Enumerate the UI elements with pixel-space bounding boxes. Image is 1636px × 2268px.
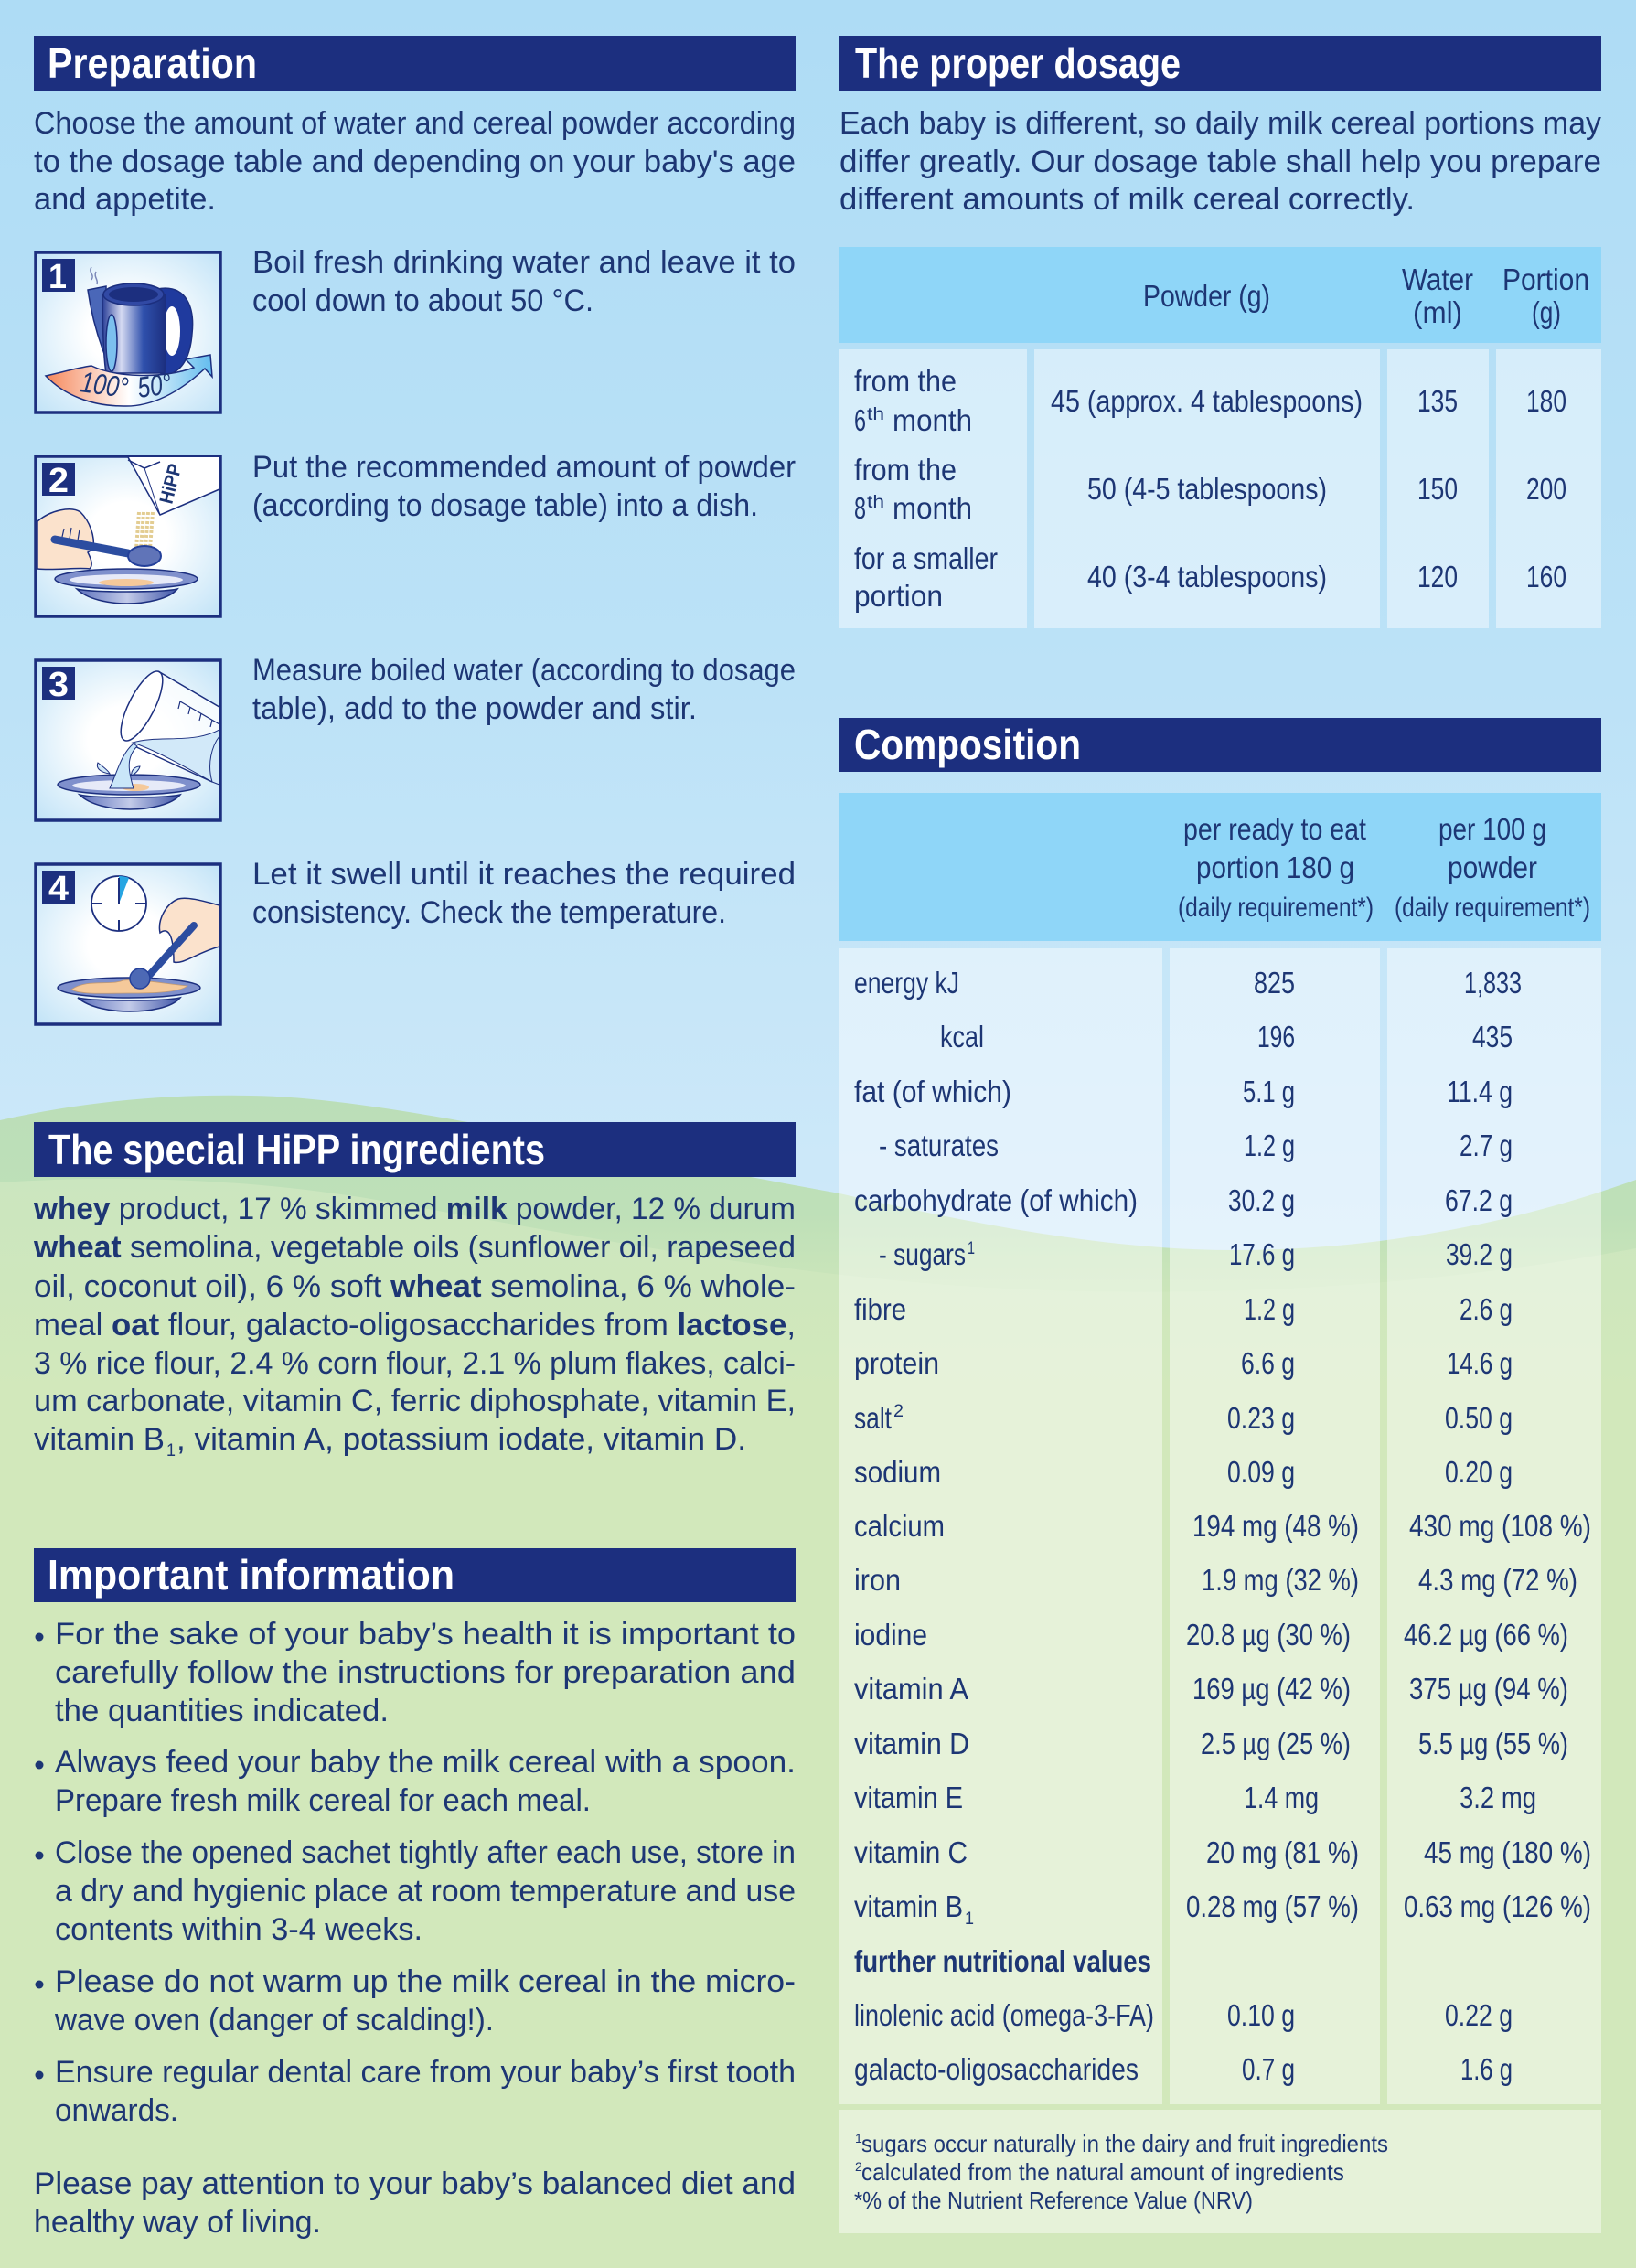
row: protein: 14.6 g xyxy=(1447,1346,1513,1380)
table header: Portion xyxy=(1502,262,1589,296)
text: bullet 4: Please do not warm up the milk cereal in the micro- xyxy=(55,1964,796,1999)
text: dosage intro xyxy=(839,106,1601,217)
row: vitamin B1: 1 xyxy=(965,1910,974,1929)
row: vitamin B1: vitamin B xyxy=(854,1889,963,1923)
table header xyxy=(839,247,1601,343)
row: 6th month: 45 (approx. 4 tablespoons) xyxy=(1051,384,1363,418)
row: vitamin A: 375 µg (94 %) xyxy=(1409,1672,1568,1706)
row: vitamin E: 3.2 mg xyxy=(1460,1781,1536,1814)
row: 6th month: 135 xyxy=(1417,384,1458,418)
row: linolenic acid xyxy=(854,1998,1513,2032)
row: iodine xyxy=(854,1618,1568,1652)
text: closing note: healthy way of living. xyxy=(34,2205,321,2240)
row: protein xyxy=(854,1346,1513,1380)
row: fat xyxy=(854,1075,1513,1108)
row: 6th month: th xyxy=(867,405,884,424)
text: ingredient list: whey product, 17 % skimmed milk powder, 12 % durum xyxy=(33,1192,796,1226)
text: bullet 1: For the sake of your baby’s health it is important to xyxy=(55,1617,796,1652)
text: step 3: Measure boiled water (according to dosage xyxy=(252,653,796,688)
row: protein: 6.6 g xyxy=(1241,1346,1295,1380)
row: vitamin E: 1.4 mg xyxy=(1244,1781,1319,1814)
table header: composition: powder xyxy=(1448,850,1537,884)
panel: composition xyxy=(839,718,1601,2233)
row: vitamin C: 45 mg (180 %) xyxy=(1424,1835,1591,1869)
row: iron: iron xyxy=(854,1563,901,1597)
row: smaller portion: 120 xyxy=(1417,560,1458,594)
text: bullet 2: Prepare fresh milk cereal for each meal. xyxy=(55,1783,591,1818)
row: iodine: 20.8 µg (30 %) xyxy=(1186,1618,1351,1652)
row: sugars: 1 xyxy=(968,1239,975,1258)
footnotes: 1 xyxy=(855,2131,862,2145)
row: kcal: kcal xyxy=(940,1020,984,1054)
row: linolenic acid: linolenic acid (omega-3-FA) xyxy=(854,1998,1154,2032)
row: smaller portion: portion xyxy=(854,579,943,613)
text: bullet 2: Always feed your baby the milk cereal with a spoon. xyxy=(55,1745,796,1780)
icon: step 2 powder: HiPP xyxy=(156,462,186,506)
table header: composition: per ready to eat xyxy=(1183,812,1366,846)
icon: step 1 kettle: 100° xyxy=(79,365,131,404)
text: preparation intro: Choose the amount of water and cereal powder according xyxy=(34,106,796,141)
row: sodium: sodium xyxy=(854,1455,941,1489)
row: 8th month: month xyxy=(893,491,972,525)
text: closing note xyxy=(34,2166,796,2240)
row: calcium: 430 mg (108 %) xyxy=(1409,1509,1591,1543)
heading: Important information: Important information xyxy=(48,1551,454,1599)
heading: Composition xyxy=(839,718,1601,772)
row: 6th month xyxy=(854,364,1566,437)
text: step 2: (according to dosage table) into a dish. xyxy=(252,488,758,523)
row: 6th month: 6 xyxy=(854,403,866,437)
row: vitamin D xyxy=(854,1727,1568,1760)
table header: (ml) xyxy=(1413,295,1462,329)
text: preparation intro: and appetite. xyxy=(34,182,216,217)
icon: step 1 kettle: 50° xyxy=(135,367,174,404)
row: vitamin B1: 0.63 mg (126 %) xyxy=(1404,1889,1591,1923)
row: sugars: 39.2 g xyxy=(1446,1237,1513,1271)
text: ingredient list xyxy=(33,1192,796,1460)
row: galacto-oligosaccharides xyxy=(854,2052,1513,2086)
text: preparation intro xyxy=(34,106,796,217)
row: calcium xyxy=(854,1509,1591,1543)
row: salt xyxy=(854,1401,1513,1435)
footnotes: 2 xyxy=(855,2159,862,2174)
text: step 1 xyxy=(252,245,796,318)
row: galacto-oligosaccharides: 1.6 g xyxy=(1460,2052,1513,2086)
table header: composition: per 100 g xyxy=(1438,812,1546,846)
row: further nutritional values: further nutritional values xyxy=(854,1944,1151,1978)
row: iron xyxy=(854,1563,1577,1597)
table: dosage xyxy=(839,247,1601,628)
row: 8th month: 150 xyxy=(1417,472,1458,506)
row: salt: 0.50 g xyxy=(1445,1401,1513,1435)
row: vitamin C: 20 mg (81 %) xyxy=(1206,1835,1359,1869)
row: smaller portion: 40 (3-4 tablespoons) xyxy=(1087,560,1327,594)
row: 8th month: 200 xyxy=(1526,472,1566,506)
row: sodium: 0.20 g xyxy=(1445,1455,1513,1489)
row: vitamin C: vitamin C xyxy=(854,1835,968,1869)
text: dosage intro: Each baby is different, so daily milk cereal portions may xyxy=(839,106,1601,141)
row: protein: protein xyxy=(854,1346,939,1380)
panel: important information xyxy=(34,1548,796,2240)
text: bullet 1 xyxy=(35,1617,796,1728)
row: kcal xyxy=(940,1020,1513,1054)
row: vitamin A: vitamin A xyxy=(854,1672,968,1706)
row: energy kJ: 825 xyxy=(1254,966,1295,1000)
row: vitamin D: 5.5 µg (55 %) xyxy=(1418,1727,1568,1760)
row: energy kJ: energy kJ xyxy=(854,966,959,1000)
heading: Preparation xyxy=(34,36,796,91)
row: iodine: iodine xyxy=(854,1618,927,1652)
row: galacto-oligosaccharides: 0.7 g xyxy=(1242,2052,1295,2086)
row: kcal: 435 xyxy=(1472,1020,1513,1054)
text: bullet 4: wave oven (danger of scalding!). xyxy=(54,2003,494,2038)
icon: step 2 powder: 2 xyxy=(48,462,69,500)
row: smaller portion: for a smaller xyxy=(854,541,998,575)
row: vitamin E xyxy=(854,1781,1536,1814)
row: vitamin D: vitamin D xyxy=(854,1727,969,1760)
panel: preparation xyxy=(34,36,796,1024)
heading: The special HiPP ingredients xyxy=(34,1122,796,1177)
row: salt: 2 xyxy=(893,1402,904,1421)
heading: The proper dosage: The proper dosage xyxy=(855,39,1181,87)
heading: The proper dosage xyxy=(839,36,1601,91)
text: ingredient list: 1 xyxy=(166,1441,176,1460)
footnotes: *% of the Nutrient Reference Value (NRV) xyxy=(854,2187,1253,2214)
table header: Powder (g) xyxy=(1143,279,1270,313)
row: saturates: - saturates xyxy=(879,1129,999,1162)
text: bullet 5: Ensure regular dental care from your baby’s first tooth xyxy=(55,2055,796,2090)
text: bullet 3: contents within 3-4 weeks. xyxy=(55,1912,422,1947)
row: kcal: 196 xyxy=(1257,1020,1295,1054)
text: ingredient list: 3 % rice flour, 2.4 % corn flour, 2.1 % plum flakes, calci- xyxy=(34,1346,796,1381)
text: bullet 3: Close the opened sachet tightly after each use, store in xyxy=(55,1835,796,1870)
heading: Important information xyxy=(34,1548,796,1602)
text: ingredient list: meal oat flour, galacto-oligosaccharides from lactose, xyxy=(34,1308,796,1343)
text: ingredient list: vitamin B xyxy=(34,1422,165,1457)
text: step 1: Boil fresh drinking water and leave it to xyxy=(252,245,796,280)
row: iodine: 46.2 µg (66 %) xyxy=(1404,1618,1568,1652)
row: fibre xyxy=(854,1292,1513,1326)
row: smaller portion: 160 xyxy=(1526,560,1566,594)
row: fat: fat (of which) xyxy=(854,1075,1011,1108)
table header: composition: (daily requirement*) xyxy=(1178,893,1374,923)
table header: composition xyxy=(839,793,1601,941)
heading: Composition: Composition xyxy=(854,721,1081,768)
text: step 3 xyxy=(252,653,796,726)
row: fat: 5.1 g xyxy=(1243,1075,1295,1108)
panel: ingredients xyxy=(33,1122,796,1460)
row: smaller portion xyxy=(854,541,1566,613)
text: step 4 xyxy=(252,857,796,930)
table cell backgrounds xyxy=(839,948,1601,2104)
row: sugars: 17.6 g xyxy=(1229,1237,1295,1271)
row: saturates xyxy=(879,1129,1513,1162)
table header: composition: (daily requirement*) xyxy=(1395,893,1590,923)
text: step 2 xyxy=(252,450,796,523)
icon: step 2 powder xyxy=(36,446,220,616)
text: dosage intro: different amounts of milk cereal correctly. xyxy=(839,182,1415,217)
text: bullet 1: the quantities indicated. xyxy=(55,1694,389,1728)
row: 6th month: month xyxy=(893,403,972,437)
text: ingredient list: oil, coconut oil), 6 % soft wheat semolina, 6 % whole- xyxy=(34,1269,796,1304)
text: step 4: consistency. Check the temperature. xyxy=(252,895,726,930)
text: bullet 5: onwards. xyxy=(55,2093,178,2128)
row: saturates: 1.2 g xyxy=(1244,1129,1295,1162)
row: 8th month: from the xyxy=(854,453,957,487)
row: 8th month: th xyxy=(867,493,884,512)
row: fibre: 2.6 g xyxy=(1460,1292,1513,1326)
table cell backgrounds xyxy=(839,349,1601,628)
text: bullet 2 xyxy=(35,1745,796,1818)
row: salt: salt xyxy=(854,1401,892,1435)
row: fibre: 1.2 g xyxy=(1244,1292,1295,1326)
icon: step 4 stir and clock: 4 xyxy=(48,870,69,908)
footnotes: calculated from the natural amount of ingredients xyxy=(861,2158,1344,2186)
text: step 2: Put the recommended amount of powder xyxy=(252,450,796,485)
text: bullet 3: a dry and hygienic place at room temperature and use xyxy=(55,1874,796,1909)
row: fat: 11.4 g xyxy=(1447,1075,1513,1108)
row: carbohydrate: 30.2 g xyxy=(1228,1183,1295,1217)
row: linolenic acid: 0.22 g xyxy=(1445,1998,1513,2032)
row: vitamin E: vitamin E xyxy=(854,1781,963,1814)
row: vitamin B1 xyxy=(854,1889,1591,1929)
table header: (g) xyxy=(1532,295,1561,329)
text: bullet 5 xyxy=(35,2055,796,2128)
text: dosage intro: differ greatly. Our dosage table shall help you prepare xyxy=(839,144,1601,179)
row: 6th month: from the xyxy=(854,364,957,398)
row: vitamin B1: 0.28 mg (57 %) xyxy=(1186,1889,1359,1923)
row: 8th month: 8 xyxy=(854,491,866,525)
row: 8th month xyxy=(854,453,1566,525)
background: front green hill xyxy=(0,1179,1636,2268)
table header: Water xyxy=(1402,262,1473,296)
text: step 3: table), add to the powder and stir. xyxy=(252,691,697,726)
background: rear green hill xyxy=(0,1096,1636,2268)
panel: proper dosage xyxy=(839,36,1601,628)
text: ingredient list: , vitamin A, potassium iodate, vitamin D. xyxy=(176,1422,746,1457)
row: sugars: - sugars xyxy=(879,1237,966,1271)
row: vitamin D: 2.5 µg (25 %) xyxy=(1201,1727,1351,1760)
text: ingredient list: wheat semolina, vegetable oils (sunflower oil, rapeseed xyxy=(33,1230,796,1265)
icon: step 4 stir and clock xyxy=(36,864,220,1024)
text: step 4: Let it swell until it reaches the required xyxy=(252,857,796,892)
text: ingredient list: um carbonate, vitamin C, ferric diphosphate, vitamin E, xyxy=(34,1384,796,1418)
text: bullet 4 xyxy=(35,1964,796,2038)
text: bullet 3 xyxy=(35,1835,796,1947)
row: vitamin A: 169 µg (42 %) xyxy=(1192,1672,1351,1706)
row: 8th month: 50 (4-5 tablespoons) xyxy=(1087,472,1327,506)
icon: step 3 pouring water: 3 xyxy=(48,666,69,704)
row: sugars xyxy=(879,1237,1513,1271)
text: bullet 1: carefully follow the instructions for preparation and xyxy=(55,1655,796,1690)
text: preparation intro: to the dosage table and depending on your baby's age xyxy=(34,144,796,179)
row: carbohydrate xyxy=(854,1183,1513,1217)
row: galacto-oligosaccharides: galacto-oligosaccharides xyxy=(854,2052,1139,2086)
icon: step 1 kettle: 1 xyxy=(48,258,67,296)
row: fibre: fibre xyxy=(854,1292,906,1326)
row: energy kJ xyxy=(854,966,1522,1000)
row: carbohydrate: carbohydrate (of which) xyxy=(854,1183,1138,1217)
row: 6th month: 180 xyxy=(1526,384,1566,418)
footnotes: sugars occur naturally in the dairy and fruit ingredients xyxy=(861,2130,1388,2157)
row: salt: 0.23 g xyxy=(1227,1401,1295,1435)
row: vitamin C xyxy=(854,1835,1591,1869)
row: calcium: calcium xyxy=(854,1509,945,1543)
icon: step 1 kettle xyxy=(36,252,220,412)
row: saturates: 2.7 g xyxy=(1460,1129,1513,1162)
heading: Preparation: Preparation xyxy=(48,39,257,87)
row: carbohydrate: 67.2 g xyxy=(1445,1183,1513,1217)
row: vitamin A xyxy=(854,1672,1568,1706)
row: energy kJ: 1,833 xyxy=(1464,966,1522,1000)
row: calcium: 194 mg (48 %) xyxy=(1192,1509,1359,1543)
row: sodium: 0.09 g xyxy=(1227,1455,1295,1489)
heading: The special HiPP ingredients: The special HiPP ingredients xyxy=(48,1126,545,1173)
row: linolenic acid: 0.10 g xyxy=(1227,1998,1295,2032)
row: iron: 1.9 mg (32 %) xyxy=(1202,1563,1359,1597)
table header: composition: portion 180 g xyxy=(1196,850,1354,884)
footnotes xyxy=(839,2110,1601,2233)
row: sodium xyxy=(854,1455,1513,1489)
icon: step 3 pouring water xyxy=(36,660,224,820)
text: step 1: cool down to about 50 °C. xyxy=(252,284,593,318)
row: iron: 4.3 mg (72 %) xyxy=(1418,1563,1577,1597)
text: closing note: Please pay attention to your baby’s balanced diet and xyxy=(34,2166,796,2201)
